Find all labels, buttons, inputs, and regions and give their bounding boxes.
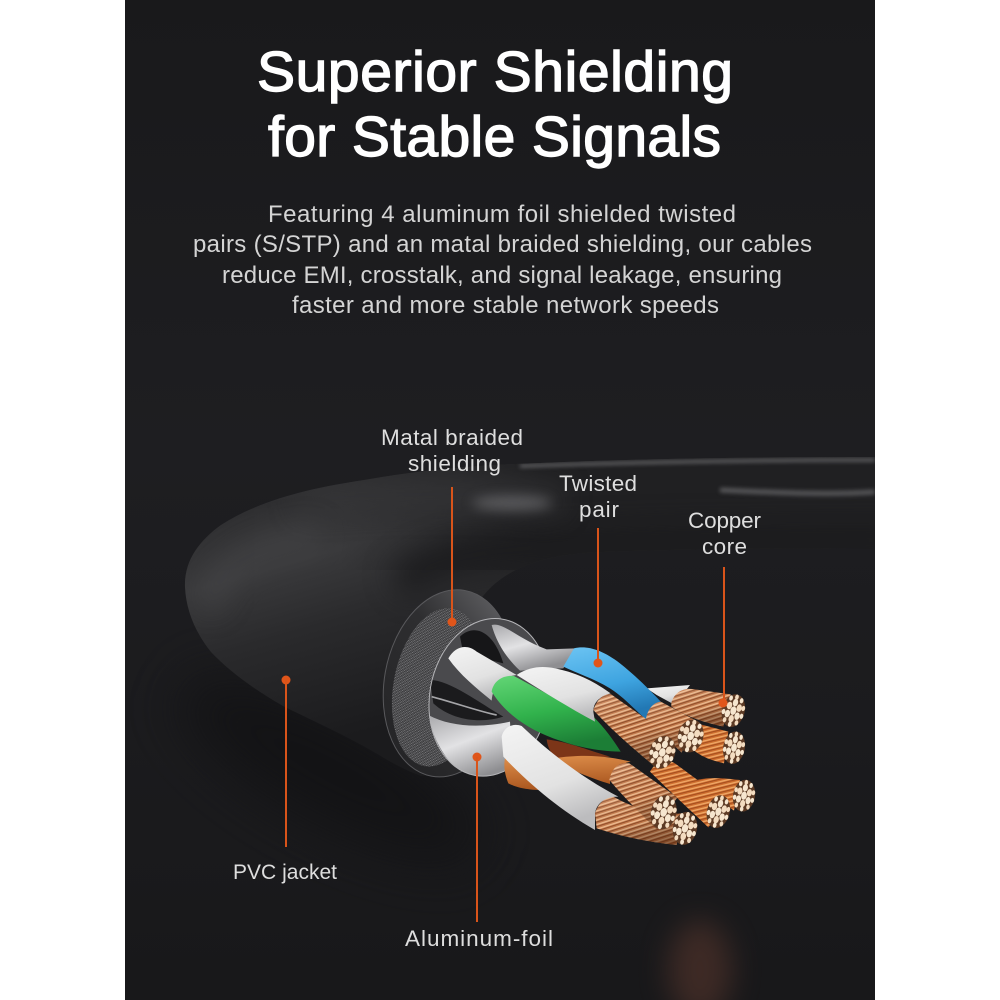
- wire: rear white foil strip: [492, 625, 575, 671]
- wire: lower white jacket: [502, 725, 618, 830]
- callout: aluminum foil: Aluminum-foil: [405, 926, 553, 951]
- title: [257, 40, 733, 169]
- wire: blue twisted pair: [563, 647, 662, 719]
- copper core: top right: [671, 689, 749, 730]
- callout: PVC jacket: [233, 676, 337, 884]
- wire: front white jacket: [517, 667, 611, 722]
- callout: twisted pair: pair: [579, 497, 620, 522]
- callout: aluminum foil: [405, 752, 553, 951]
- cable: aluminum foil interior: [428, 618, 549, 777]
- twisted pairs, foil, braid and copper cores: [369, 579, 758, 847]
- wire: rear white jacket: [648, 685, 690, 703]
- copper core: lower front: [609, 763, 680, 832]
- description text: faster and more stable network speeds: [292, 292, 719, 319]
- copper core: front upper: [593, 694, 680, 772]
- copper core: lower bottom: [595, 797, 700, 847]
- copper core: lower far right: [697, 778, 758, 813]
- callout: metal braided shielding: shielding: [408, 451, 501, 476]
- wire: left white foil into green: [448, 647, 517, 701]
- cable: metal braided shielding: [392, 608, 472, 766]
- callout: twisted pair: [559, 471, 637, 668]
- copper core: blue wire: [646, 702, 704, 752]
- wire: green twisted pair: [492, 676, 621, 752]
- description text: [193, 201, 812, 319]
- description text: Featuring 4 aluminum foil shielded twisted: [268, 201, 736, 228]
- description text: reduce EMI, crosstalk, and signal leakage, ensuring: [222, 262, 782, 289]
- callout: copper core: core: [702, 534, 747, 559]
- wire: dark orange rear: [546, 739, 610, 758]
- callout: copper core: [688, 508, 762, 708]
- callout: PVC jacket: PVC jacket: [233, 861, 337, 884]
- cable: end cap ring: [382, 589, 502, 778]
- description text: pairs (S/STP) and an matal braided shielding, our cables: [193, 231, 812, 258]
- panel: dark background: [125, 0, 900, 1000]
- callout: twisted pair: Twisted: [559, 471, 637, 496]
- callout: copper core: Copper: [688, 508, 762, 533]
- callout: metal braided shielding: [381, 425, 523, 626]
- callout: metal braided shielding: Matal braided: [381, 425, 523, 450]
- wire: orange twisted pair: [504, 756, 631, 790]
- title: for Stable Signals: [268, 105, 721, 169]
- title: Superior Shielding: [257, 40, 733, 104]
- copper core: right middle: [694, 724, 746, 764]
- copper core: lower centre right: [650, 761, 734, 831]
- cable: PVC jacket: [185, 457, 875, 726]
